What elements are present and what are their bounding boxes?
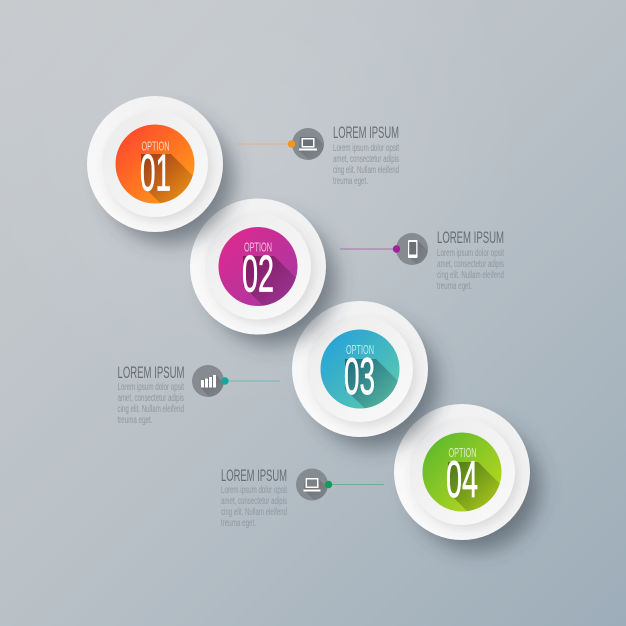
icon: computer xyxy=(296,468,328,500)
option label 4: OPTION xyxy=(448,445,476,460)
text block 4: treuma eget. xyxy=(221,518,256,529)
callout 4 xyxy=(221,467,384,529)
text block 3: cing elit. Nullam eleifend xyxy=(118,404,184,415)
text block 1: amet, consectetur adipis xyxy=(333,154,399,165)
number 02: 02 xyxy=(242,246,274,304)
text block 4: Lorem ipsum dolor opsit xyxy=(221,485,287,496)
icon: bar chart xyxy=(192,365,224,397)
step 4 circle xyxy=(394,404,540,551)
text block 3 xyxy=(118,364,184,426)
option label 2: OPTION xyxy=(244,240,272,254)
text block 1: treuma eget. xyxy=(333,176,368,187)
text block 3: treuma eget. xyxy=(118,415,152,426)
option label 3: OPTION xyxy=(346,342,374,357)
text block 3: Lorem ipsum dolor opsit xyxy=(118,382,184,393)
icon: phone xyxy=(396,233,428,265)
number 01: 01 xyxy=(140,144,171,202)
text block 2: Lorem ipsum dolor opsit xyxy=(437,248,504,259)
text block 2: LOREM IPSUM xyxy=(437,229,504,247)
text block 2: cing elit. Nullam eleifend xyxy=(437,270,504,281)
text block 1: LOREM IPSUM xyxy=(333,124,399,142)
text block 2 xyxy=(437,229,504,292)
text block 1: cing elit. Nullam eleifend xyxy=(333,165,399,176)
text block 4 xyxy=(221,467,287,529)
callout 2 xyxy=(340,229,504,292)
callout 3 xyxy=(118,364,280,426)
text block 2: treuma eget. xyxy=(437,281,472,292)
text block 1 xyxy=(333,124,399,187)
step 2 circle xyxy=(190,198,336,345)
text block 3: amet, consectetur adipis xyxy=(118,393,184,404)
text block 4: cing elit. Nullam eleifend xyxy=(221,507,287,518)
text block 3: LOREM IPSUM xyxy=(118,364,184,382)
step 1 circle xyxy=(87,96,233,243)
text block 1: Lorem ipsum dolor opsit xyxy=(333,143,399,154)
text block 4: amet, consectetur adipis xyxy=(221,496,287,507)
text block 2: amet, consectetur adipis xyxy=(437,259,504,270)
option label 1: OPTION xyxy=(142,138,170,154)
text block 4: LOREM IPSUM xyxy=(221,467,287,485)
number 04: 04 xyxy=(446,451,478,509)
number 03: 03 xyxy=(344,348,375,406)
icon: laptop xyxy=(292,128,324,160)
callout 1 xyxy=(236,124,399,187)
step 3 circle xyxy=(292,301,438,448)
